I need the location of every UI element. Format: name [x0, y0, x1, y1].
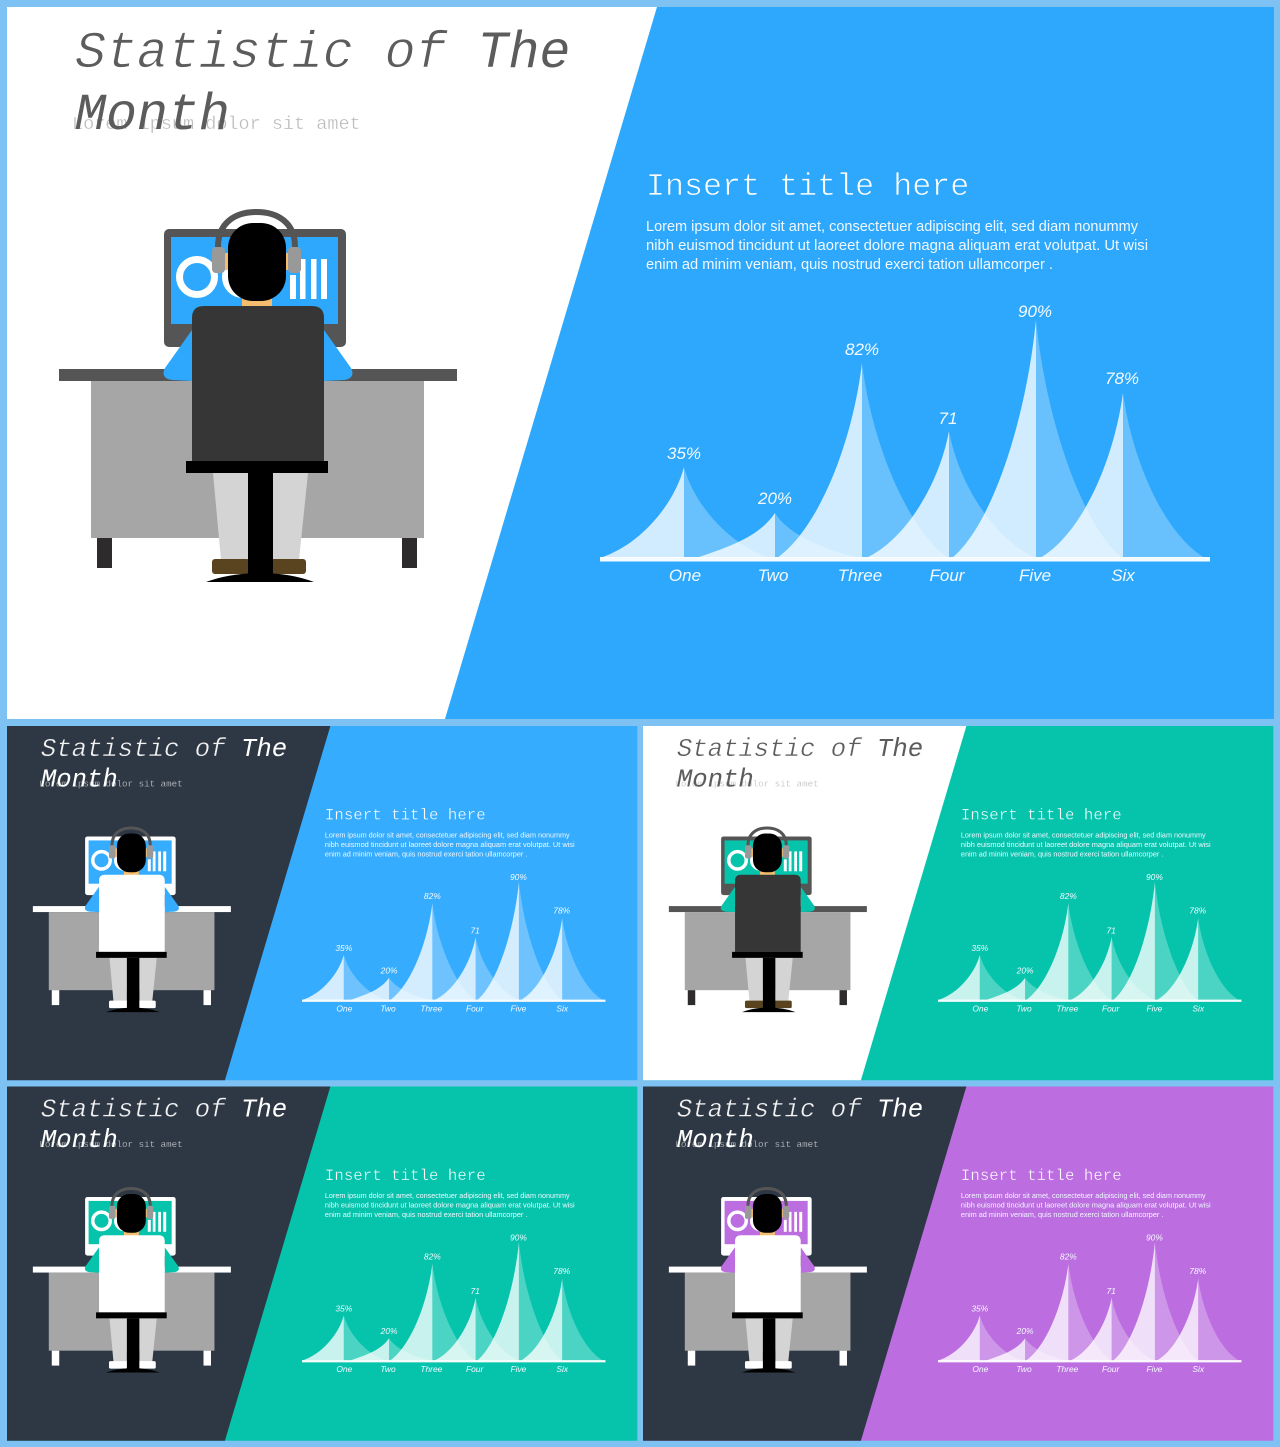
peak chart: 20%	[380, 1326, 398, 1336]
subtitle: Lorem ipsum dolor sit amet	[675, 1139, 819, 1150]
peak chart: 78%	[1189, 906, 1207, 916]
body text: nibh euismod tincidunt ut laoreet dolore magna aliquam erat volutpat. Ut wisi	[325, 840, 575, 849]
peak chart: 90%	[1146, 1233, 1163, 1243]
peak chart: Five	[1146, 1364, 1163, 1374]
body text: Lorem ipsum dolor sit amet, consectetuer adipiscing elit, sed diam nonummy	[961, 830, 1206, 839]
peak chart: Five	[510, 1364, 527, 1374]
peak chart: Six	[1192, 1004, 1205, 1014]
peak chart: Three	[420, 1364, 443, 1374]
panel: dark and blue slide	[7, 726, 637, 1080]
illustration: person at desk	[59, 212, 457, 582]
peak chart: 90%	[510, 1233, 527, 1243]
heading: Insert title here	[961, 807, 1122, 825]
body text: enim ad minim veniam, quis nostrud exerci tation ullamcorper .	[325, 1210, 527, 1219]
body text: enim ad minim veniam, quis nostrud exerci tation ullamcorper .	[961, 1210, 1163, 1219]
body text	[325, 830, 575, 858]
slide background	[7, 7, 1274, 719]
illustration: person at desk	[33, 1188, 231, 1373]
left diagonal panel	[7, 7, 657, 719]
peak chart: Five	[1146, 1004, 1163, 1014]
body text: nibh euismod tincidunt ut laoreet dolore magna aliquam erat volutpat. Ut wisi	[325, 1200, 575, 1209]
left diagonal panel	[643, 1086, 966, 1441]
body text	[325, 1191, 575, 1219]
body text: nibh euismod tincidunt ut laoreet dolore magna aliquam erat volutpat. Ut wisi	[961, 1200, 1211, 1209]
peak chart: Six	[556, 1004, 569, 1014]
peak chart	[938, 1233, 1241, 1374]
peak chart: 82%	[424, 891, 441, 901]
body text: Lorem ipsum dolor sit amet, consectetuer adipiscing elit, sed diam nonummy	[325, 1191, 570, 1200]
title: Statistic of	[677, 735, 877, 764]
peak chart: 71	[939, 409, 957, 428]
peak chart: Five	[510, 1004, 527, 1014]
illustration: person at desk	[33, 828, 231, 1012]
peak chart: 82%	[1060, 891, 1077, 901]
peak chart: 35%	[971, 1303, 989, 1313]
body text: Lorem ipsum dolor sit amet, consectetuer adipiscing elit, sed diam nonummy	[325, 830, 570, 839]
title: Statistic of	[41, 1095, 241, 1124]
peak chart: Four	[466, 1364, 485, 1374]
slide background	[7, 726, 637, 1080]
peak chart: Five	[1019, 566, 1051, 585]
peak chart: One	[336, 1004, 353, 1014]
peak chart: Three	[420, 1004, 443, 1014]
subtitle: Lorem ipsum dolor sit amet	[72, 114, 361, 135]
subtitle: Lorem ipsum dolor sit amet	[675, 779, 819, 790]
peak chart: 78%	[553, 906, 571, 916]
peak chart: One	[972, 1364, 989, 1374]
peak chart: 78%	[553, 1266, 571, 1276]
title: The	[241, 1095, 287, 1124]
panel: white and green slide	[643, 726, 1273, 1080]
title: Month	[41, 1126, 118, 1155]
body text: Lorem ipsum dolor sit amet, consectetuer adipiscing elit, sed diam nonummy	[961, 1191, 1206, 1200]
peak chart	[302, 872, 605, 1014]
subtitle: Lorem ipsum dolor sit amet	[39, 1139, 183, 1150]
peak chart: 35%	[335, 943, 353, 953]
peak chart: Six	[1111, 566, 1135, 585]
peak chart: 82%	[845, 340, 879, 359]
peak chart: 90%	[1018, 302, 1052, 321]
title: Month	[677, 1126, 754, 1155]
left diagonal panel	[7, 1086, 330, 1441]
title: Month	[677, 766, 754, 795]
peak chart: Four	[1102, 1364, 1121, 1374]
peak chart: 71	[470, 925, 480, 935]
title: The	[877, 735, 923, 764]
peak chart: 71	[470, 1286, 480, 1296]
body text: enim ad minim veniam, quis nostrud exerci tation ullamcorper .	[961, 849, 1163, 858]
body text: Lorem ipsum dolor sit amet, consectetuer adipiscing elit, sed diam nonummy	[646, 219, 1139, 235]
peak chart: 20%	[757, 489, 792, 508]
slide background	[643, 1086, 1273, 1441]
peak chart: Six	[1192, 1364, 1205, 1374]
illustration: person at desk	[669, 1188, 867, 1373]
peak chart: One	[972, 1004, 989, 1014]
peak chart: Two	[380, 1364, 396, 1374]
peak chart: 71	[1106, 1286, 1116, 1296]
body text: enim ad minim veniam, quis nostrud exerci tation ullamcorper .	[646, 257, 1053, 273]
peak chart: Two	[1016, 1004, 1032, 1014]
peak chart: Three	[1056, 1004, 1079, 1014]
heading: Insert title here	[646, 169, 969, 205]
peak chart: 20%	[1016, 1326, 1034, 1336]
peak chart: 35%	[335, 1303, 353, 1313]
peak chart: Four	[1102, 1004, 1121, 1014]
peak chart: 78%	[1105, 369, 1139, 388]
panel: dark and green slide	[7, 1086, 637, 1441]
body text	[961, 1191, 1211, 1219]
peak chart: 35%	[971, 943, 989, 953]
peak chart: 82%	[424, 1252, 441, 1262]
title: Statistic of	[41, 735, 241, 764]
body text: nibh euismod tincidunt ut laoreet dolore magna aliquam erat volutpat. Ut wisi	[646, 238, 1148, 254]
peak chart: One	[336, 1364, 353, 1374]
peak chart	[302, 1233, 605, 1374]
slide background	[7, 1086, 637, 1441]
title: Month	[41, 766, 118, 795]
title: The	[241, 735, 287, 764]
peak chart	[600, 302, 1210, 585]
peak chart	[938, 872, 1241, 1014]
title: The	[478, 25, 570, 83]
left diagonal panel	[643, 726, 966, 1080]
peak chart: 78%	[1189, 1266, 1207, 1276]
subtitle: Lorem ipsum dolor sit amet	[39, 779, 183, 790]
peak chart: 90%	[510, 872, 527, 882]
peak chart: 35%	[667, 444, 701, 463]
peak chart: Three	[838, 566, 882, 585]
title: The	[877, 1095, 923, 1124]
peak chart: Two	[1016, 1364, 1032, 1374]
left diagonal panel	[7, 726, 330, 1080]
body text	[646, 219, 1148, 273]
panel: large white and blue slide	[7, 7, 1274, 719]
peak chart: Four	[466, 1004, 485, 1014]
title: Statistic of	[677, 1095, 877, 1124]
body text: nibh euismod tincidunt ut laoreet dolore magna aliquam erat volutpat. Ut wisi	[961, 840, 1211, 849]
body text	[961, 830, 1211, 858]
peak chart: 71	[1106, 925, 1116, 935]
slide background	[643, 726, 1273, 1080]
heading: Insert title here	[961, 1167, 1122, 1185]
peak chart: Six	[556, 1364, 569, 1374]
title: Month	[75, 87, 230, 145]
title: Statistic of	[75, 25, 478, 83]
peak chart: One	[669, 566, 701, 585]
heading: Insert title here	[325, 1167, 486, 1185]
peak chart: Two	[758, 566, 788, 585]
peak chart: 82%	[1060, 1252, 1077, 1262]
peak chart: Four	[930, 566, 966, 585]
illustration: person at desk	[669, 828, 867, 1012]
heading: Insert title here	[325, 807, 486, 825]
peak chart: 90%	[1146, 872, 1163, 882]
peak chart: 20%	[380, 965, 398, 975]
peak chart: Three	[1056, 1364, 1079, 1374]
body text: enim ad minim veniam, quis nostrud exerci tation ullamcorper .	[325, 849, 527, 858]
peak chart: 20%	[1016, 965, 1034, 975]
peak chart: Two	[380, 1004, 396, 1014]
panel: dark and purple slide	[643, 1086, 1273, 1441]
